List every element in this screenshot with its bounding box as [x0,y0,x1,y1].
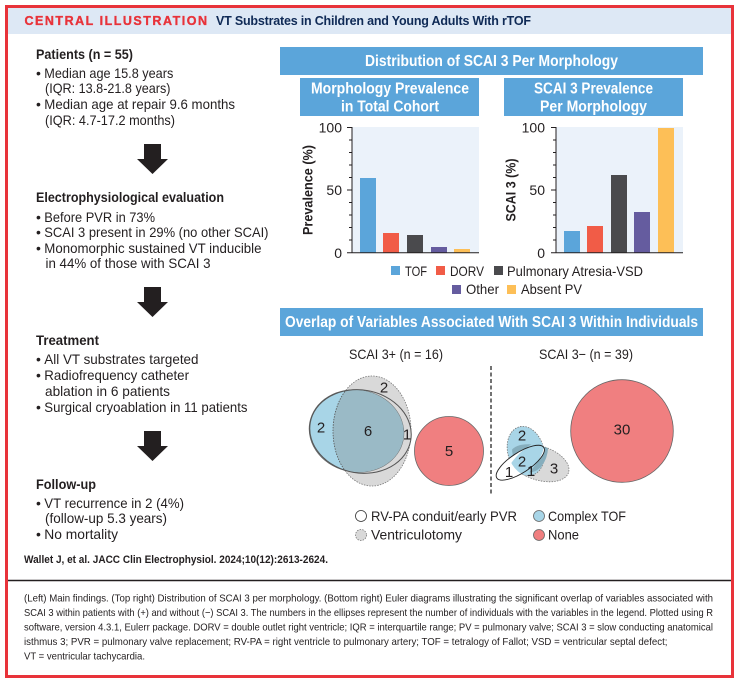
euler diagram: SCAI 3+: 1 [403,426,411,444]
morphology legend: Other [466,281,499,297]
bar chart: morphology prevalence: 0 [334,245,342,261]
euler diagram: SCAI 3+: SCAI 3+ (n = 16) [349,346,443,362]
bar chart: SCAI 3 prevalence: 50 [529,182,545,198]
arrow 1 [137,144,168,174]
text block: follow-up: • [36,495,41,511]
text block: treatment: Treatment [36,332,99,348]
section heading: distribution [280,47,703,75]
section heading: overlap [280,308,703,336]
morphology legend: Pulmonary Atresia-VSD [507,263,643,279]
morphology legend [391,263,643,297]
euler diagram: SCAI 3-: 30 [614,422,630,438]
euler diagram: SCAI 3+: 2 [317,420,325,436]
text block: electrophysiological evaluation: • [36,240,41,256]
subheading: morphology prevalence: in Total Cohort [341,98,439,116]
text block: treatment [36,332,248,415]
text block: electrophysiological evaluation: SCAI 3 present in 29% (no other SCAI) [44,224,268,240]
text block: follow-up: • [36,526,41,542]
citation: Wallet J, et al. JACC Clin Electrophysiol. 2024;10(12):2613-2624. [24,554,328,566]
euler diagram: SCAI 3+ [303,346,484,486]
text block: treatment: Radiofrequency catheter [44,367,189,383]
euler diagram: SCAI 3-: 2 [518,428,526,444]
euler diagram: SCAI 3- [491,346,673,489]
bar chart: morphology prevalence: Prevalence (%) [300,145,316,235]
text block: electrophysiological evaluation: • [36,224,41,240]
arrow 3 [137,431,168,461]
euler diagram: SCAI 3-: 3 [550,460,558,478]
subheading: morphology prevalence [300,78,479,116]
text block: treatment: ablation in 6 patients [45,383,170,399]
text block: patients: Median age 15.8 years [44,65,173,81]
bar chart: SCAI 3 prevalence: 100 [522,120,545,136]
subheading: SCAI 3 prevalence: SCAI 3 Prevalence [534,80,653,98]
text block: follow-up: Follow-up [36,476,96,492]
header band [8,8,731,34]
morphology legend: TOF [405,263,427,279]
text block: patients: • [36,96,41,112]
euler legend [356,508,626,542]
text block: treatment: • [36,399,41,415]
euler legend: Ventriculotomy [371,526,462,542]
text block: patients: (IQR: 4.7-17.2 months) [45,112,175,128]
morphology legend: DORV [450,263,485,279]
label: central illustration: CENTRAL ILLUSTRATION [24,14,207,28]
caption [24,592,713,662]
bar chart: SCAI 3 prevalence: SCAI 3 (%) [502,158,518,222]
euler legend: RV-PA conduit/early PVR [371,508,517,524]
text block: treatment: All VT substrates targeted [44,351,198,367]
euler diagram: SCAI 3-: 1 [505,464,513,481]
bar chart: SCAI 3 prevalence: 0 [537,245,545,261]
text block: treatment: Surgical cryoablation in 11 patients [44,399,247,415]
euler legend: Complex TOF [548,508,626,524]
morphology legend: Absent PV [521,281,583,297]
text block: follow-up: No mortality [44,526,118,542]
caption: isthmus 3; PVR = pulmonary valve replacement; RV-PA = right ventricle to pulmonary artery; TOF = tetralogy of Fallot; VSD = ventricular septal defect; [24,636,668,648]
text block: electrophysiological evaluation: Electrophysiological evaluation [36,189,224,205]
euler legend: None [548,526,579,542]
section heading: overlap: Overlap of Variables Associated With SCAI 3 Within Individuals [285,314,698,331]
text block: electrophysiological evaluation: Before PVR in 73% [44,209,155,225]
bar chart: morphology prevalence [300,120,479,261]
euler diagram: SCAI 3-: 2 [518,454,526,470]
euler diagram: SCAI 3-: SCAI 3− (n = 39) [539,346,633,362]
text block: patients: Patients (n = 55) [36,46,133,62]
text block: electrophysiological evaluation: Monomorphic sustained VT inducible [44,240,262,256]
text block: electrophysiological evaluation: • [36,209,41,225]
section heading: distribution: Distribution of SCAI 3 Per Morphology [365,53,618,70]
dashed divider [490,366,492,494]
text block: follow-up [36,476,184,542]
bar chart: SCAI 3 prevalence [502,120,683,261]
text block: patients [36,46,235,128]
subheading: morphology prevalence: Morphology Prevalence [311,80,469,98]
text block: treatment: • [36,367,41,383]
caption rule [8,580,731,582]
text block: follow-up: VT recurrence in 2 (4%) [44,495,184,511]
subheading: SCAI 3 prevalence [504,78,683,116]
text block: electrophysiological evaluation [36,189,268,271]
text block: patients: (IQR: 13.8-21.8 years) [45,80,170,96]
text block: treatment: • [36,351,41,367]
subheading: SCAI 3 prevalence: Per Morphology [540,98,647,116]
euler diagram: SCAI 3+: 6 [364,423,372,440]
text block: patients: Median age at repair 9.6 months [44,96,235,112]
euler diagram: SCAI 3+: 5 [445,443,453,460]
euler diagram: SCAI 3-: 1 [527,463,535,480]
caption: VT = ventricular tachycardia. [24,650,145,662]
bar chart: morphology prevalence: 100 [319,120,342,136]
euler diagram: SCAI 3+: 2 [380,380,388,396]
title: VT Substrates in Children and Young Adults With rTOF [216,14,531,28]
text block: electrophysiological evaluation: in 44% of those with SCAI 3 [46,255,211,271]
arrow 2 [137,287,168,317]
text block: patients: • [36,65,41,81]
text block: follow-up: (follow-up 5.3 years) [45,510,167,526]
bar chart: morphology prevalence: 50 [326,182,342,198]
